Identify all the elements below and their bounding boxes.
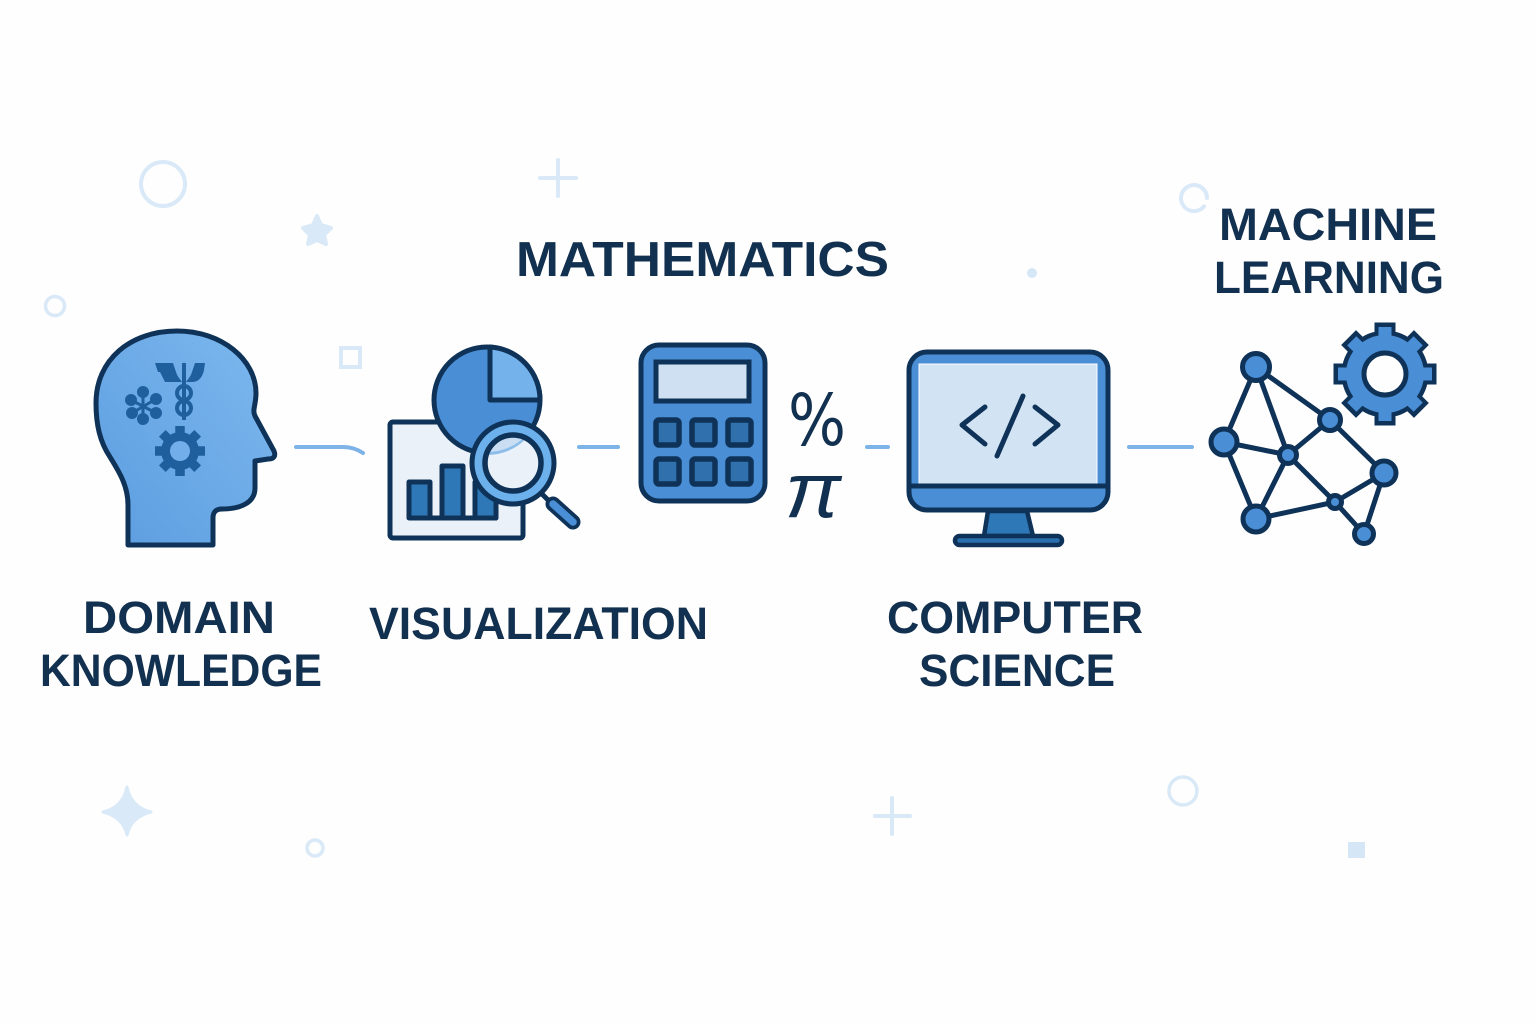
code symbol (962, 396, 1058, 456)
pie chart (434, 347, 540, 453)
heading: domain knowledge (40, 592, 322, 696)
heading: computer science: SCIENCE (919, 645, 1115, 696)
report sheet (390, 422, 523, 538)
icon: gear (155, 426, 205, 476)
heading: machine learning (1214, 199, 1444, 303)
monitor base (955, 536, 1062, 545)
connector lines (296, 447, 1192, 453)
icon: head with domain symbols (96, 331, 275, 545)
heading: mathematics: MATHEMATICS (516, 233, 889, 287)
heading: computer science: COMPUTER (887, 592, 1143, 643)
network nodes (1211, 354, 1396, 544)
icon: charts with magnifying glass (390, 342, 573, 538)
pi symbol: π (785, 446, 843, 534)
icon: neural network with gear (1211, 322, 1436, 544)
head silhouette (96, 331, 275, 545)
icon: caduceus (155, 363, 205, 420)
heading: visualization: VISUALIZATION (369, 598, 708, 649)
icon: computer monitor (909, 352, 1108, 545)
calculator buttons (656, 420, 751, 484)
icon: calculator (641, 345, 765, 501)
magnifying glass (470, 420, 580, 530)
heading: computer science (887, 592, 1143, 696)
heading: machine learning: LEARNING (1214, 252, 1444, 303)
network edges (1224, 367, 1384, 534)
calculator display (656, 362, 749, 401)
monitor body (909, 352, 1108, 510)
background decorations (46, 160, 1365, 858)
heading: domain knowledge: DOMAIN (83, 592, 275, 643)
gear (1334, 322, 1436, 426)
monitor screen (919, 364, 1097, 484)
monitor stand (984, 511, 1033, 536)
bar chart (409, 466, 497, 518)
icon: molecule (126, 388, 160, 424)
heading: domain knowledge: KNOWLEDGE (40, 645, 322, 696)
percent symbol: % (788, 379, 846, 462)
heading: machine learning: MACHINE (1219, 199, 1437, 250)
